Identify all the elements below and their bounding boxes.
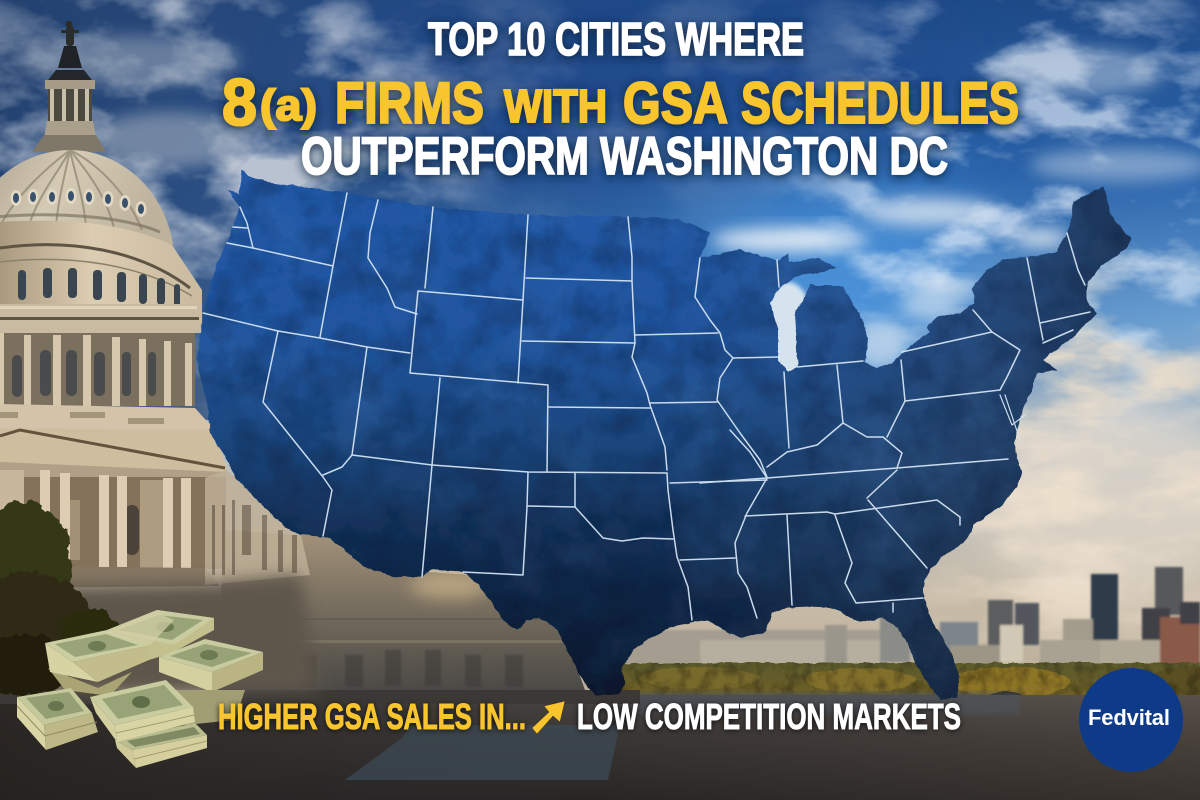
cash stack: right: [159, 639, 263, 692]
icon: yellow arrow: [532, 701, 565, 734]
title line 2: [222, 65, 1019, 139]
map fill with texture: [190, 165, 1140, 710]
capitol side wing: [205, 470, 310, 585]
tree line along river: [620, 663, 1200, 714]
tagline: low competition markets: LOW COMPETITION MARKETS: [577, 696, 961, 737]
tree at left: [0, 502, 120, 695]
title line 2: (a): [260, 81, 317, 130]
portico columns: [0, 470, 226, 588]
balustrade ring: [0, 304, 202, 333]
tagline: higher GSA sales: HIGHER GSA SALES IN...: [218, 696, 526, 737]
dome: [0, 150, 173, 245]
title line 2: GSA: [623, 71, 728, 136]
Fedvital logo: [1079, 668, 1183, 772]
faded building reflection: [215, 530, 585, 690]
terrace balustrade: [0, 404, 213, 434]
Fedvital logo: Fedvital: [1088, 705, 1171, 730]
title line 2: 8: [222, 65, 257, 139]
pale lake water: [762, 282, 814, 378]
map of the United States: [190, 165, 1140, 710]
title line 2: WITH: [504, 80, 607, 132]
rotunda colonnade: [0, 333, 195, 406]
cash stack: lower left: [17, 688, 98, 750]
capitol building: [0, 20, 320, 696]
stacks of cash: [17, 610, 263, 768]
cash stack: left upper: [45, 612, 174, 696]
capitol lower courtyard: [50, 575, 320, 696]
drum with windows: [0, 221, 202, 306]
cash stack: middle: [90, 680, 195, 742]
title line 2: FIRMS: [335, 71, 484, 136]
title line 2: SCHEDULES: [741, 71, 1019, 136]
state borders: [203, 193, 1090, 620]
cash stack: bottom: [115, 723, 207, 768]
title: [222, 13, 1019, 186]
title line 1: TOP 10 CITIES WHERE: [428, 13, 804, 65]
river and ground: [0, 690, 1200, 800]
statue of freedom: [58, 20, 82, 68]
cash stack: back top: [107, 610, 214, 660]
title line 3: OUTPERFORM WASHINGTON DC: [301, 127, 948, 186]
portico pediment: [0, 428, 226, 480]
distant city skyline: [625, 567, 1200, 669]
cash stack: back lower: [170, 690, 245, 725]
lantern tholos: [32, 70, 106, 152]
